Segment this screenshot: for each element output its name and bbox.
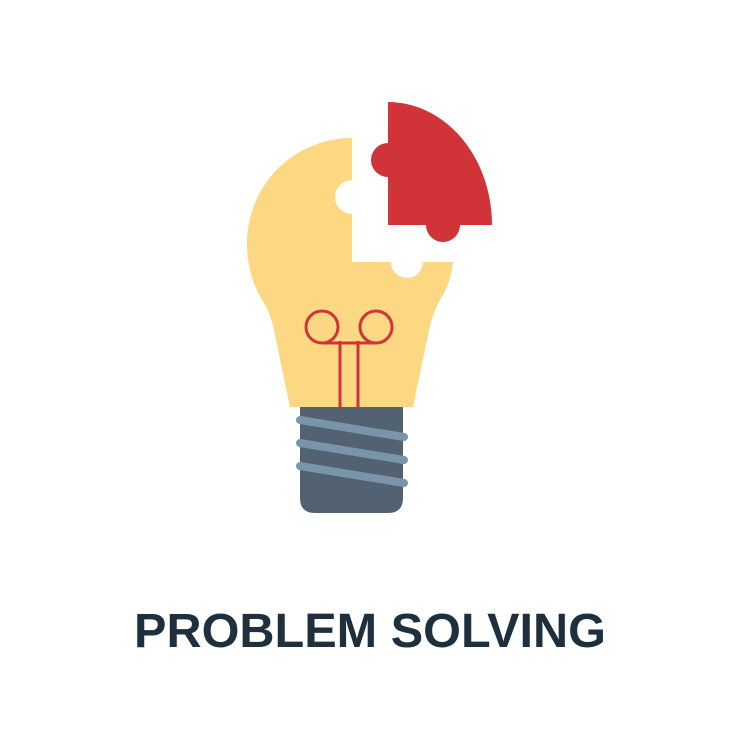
title: PROBLEM SOLVING: [134, 605, 606, 658]
puzzle notches: [335, 180, 423, 278]
bulb glass: [247, 138, 453, 407]
filament: [306, 311, 392, 407]
red puzzle piece: [371, 102, 492, 242]
icon: light bulb with puzzle: [247, 102, 492, 513]
bulb base: [300, 407, 404, 513]
